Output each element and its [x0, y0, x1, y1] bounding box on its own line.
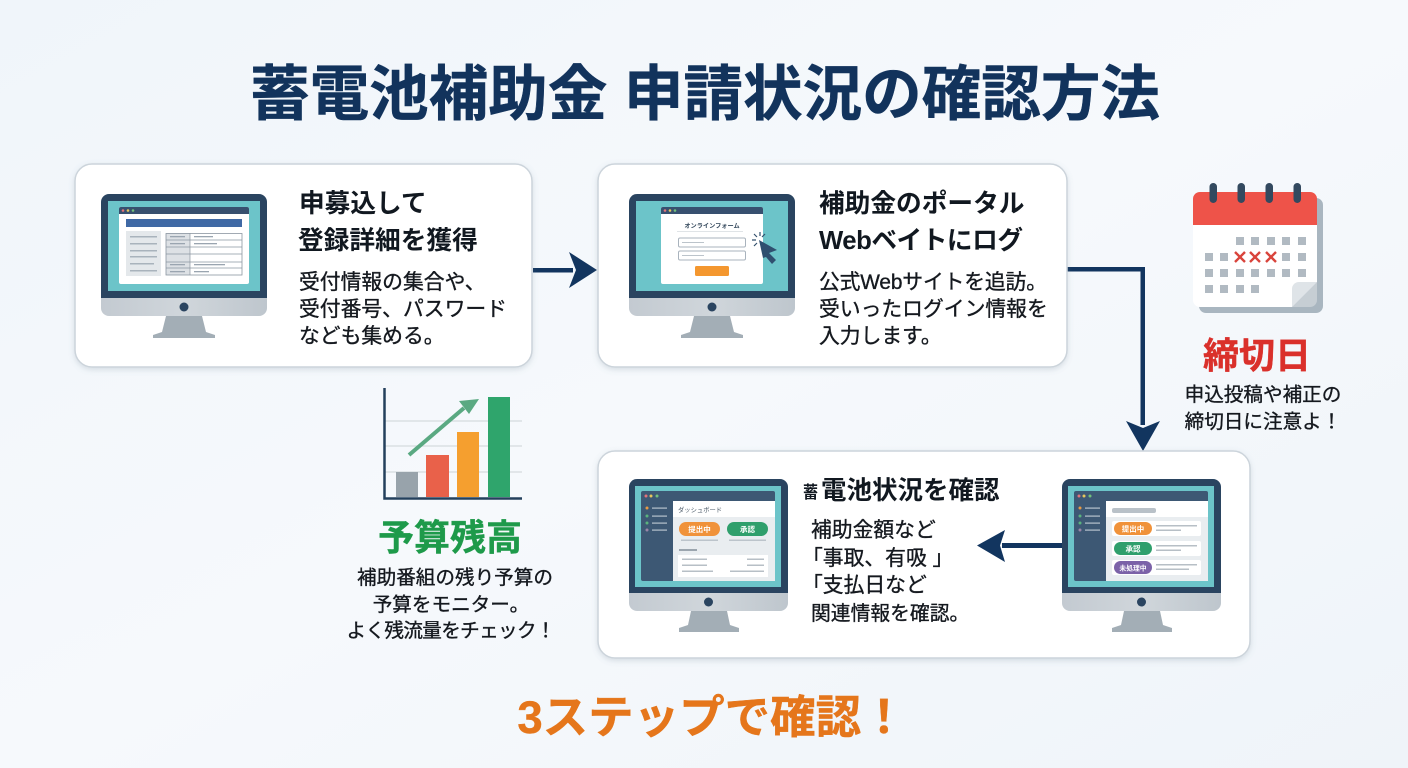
text: step 2 description: 公式Webサイトを追訪。	[819, 271, 1047, 294]
title: 蓄電池補助金 申請状況の確認方法	[250, 61, 1160, 128]
text: budget note: よく残流量をチェック！	[346, 620, 556, 642]
heading: step 1: 申募込して	[299, 189, 427, 218]
arrow: step 2 to step 3	[1067, 267, 1160, 451]
icon: dashboard monitor	[629, 479, 788, 632]
icon: calendar	[1193, 183, 1323, 313]
text: budget note: 補助番組の残り予算の	[357, 567, 553, 589]
text: deadline note	[1185, 384, 1341, 433]
text: step 3 description: 関連情報を確認。	[811, 603, 969, 625]
panel: step 2	[598, 164, 1067, 367]
icon: status list monitor: 承認	[1126, 544, 1141, 554]
text: step 3 description: 「事取、有吸 」	[802, 547, 953, 570]
text: step 3 description: 「支払日など	[802, 574, 927, 597]
arrow: status monitor to text	[977, 530, 1063, 562]
heading: deadline: 締切日	[1203, 335, 1311, 376]
panel: step 3	[598, 451, 1250, 658]
heading: step 2 second line: Webベイトにログ	[819, 225, 1023, 255]
icon: monitor with table	[101, 194, 267, 338]
text: step 1 description: 受付情報の集合や、	[299, 271, 486, 294]
heading: step 1 second line: 登録詳細を獲得	[298, 226, 478, 255]
icon: dashboard monitor: ダッシュボード	[678, 505, 722, 514]
heading: step 3: 蓄	[803, 483, 818, 502]
text: step 2 description: 受いったログイン情報を	[819, 298, 1048, 321]
chart: budget bar chart	[384, 388, 522, 498]
icon: status list monitor: 提出中	[1122, 524, 1144, 534]
text: step 1 description: なども集める。	[299, 325, 445, 348]
heading: step 2: 補助金のポータル	[819, 189, 1024, 218]
heading: step 3: 電池状況を確認	[821, 477, 1000, 505]
icon: monitor with login form	[629, 194, 795, 338]
icon: status list monitor: 未処理中	[1119, 564, 1147, 572]
icon: cursor	[752, 232, 777, 264]
text: step 2 description	[819, 271, 1048, 348]
icon: dashboard monitor: 承認	[740, 525, 755, 534]
arrow: step 1 to step 2	[533, 252, 597, 288]
text: budget note	[346, 567, 556, 642]
callout: three steps: 3ステップで確認！	[517, 692, 907, 743]
icon: dashboard monitor: 提出中	[688, 524, 711, 534]
text: step 3 description	[802, 519, 969, 625]
text: step 3 description: 補助金額など	[811, 519, 936, 542]
text: step 1 description	[299, 271, 507, 348]
icon: status list monitor	[1062, 479, 1221, 632]
text: deadline note: 締切日に注意よ！	[1185, 411, 1341, 433]
text: deadline note: 申込投稿や補正の	[1185, 384, 1341, 406]
text: step 1 description: 受付番号、パスワード	[299, 298, 507, 321]
panel: step 1	[75, 164, 532, 367]
heading: budget: 予算残高	[378, 517, 522, 558]
text: budget note: 予算をモニター。	[373, 594, 529, 616]
icon: monitor with login form: オンラインフォーム	[684, 223, 740, 230]
text: step 2 description: 入力します。	[819, 325, 942, 348]
